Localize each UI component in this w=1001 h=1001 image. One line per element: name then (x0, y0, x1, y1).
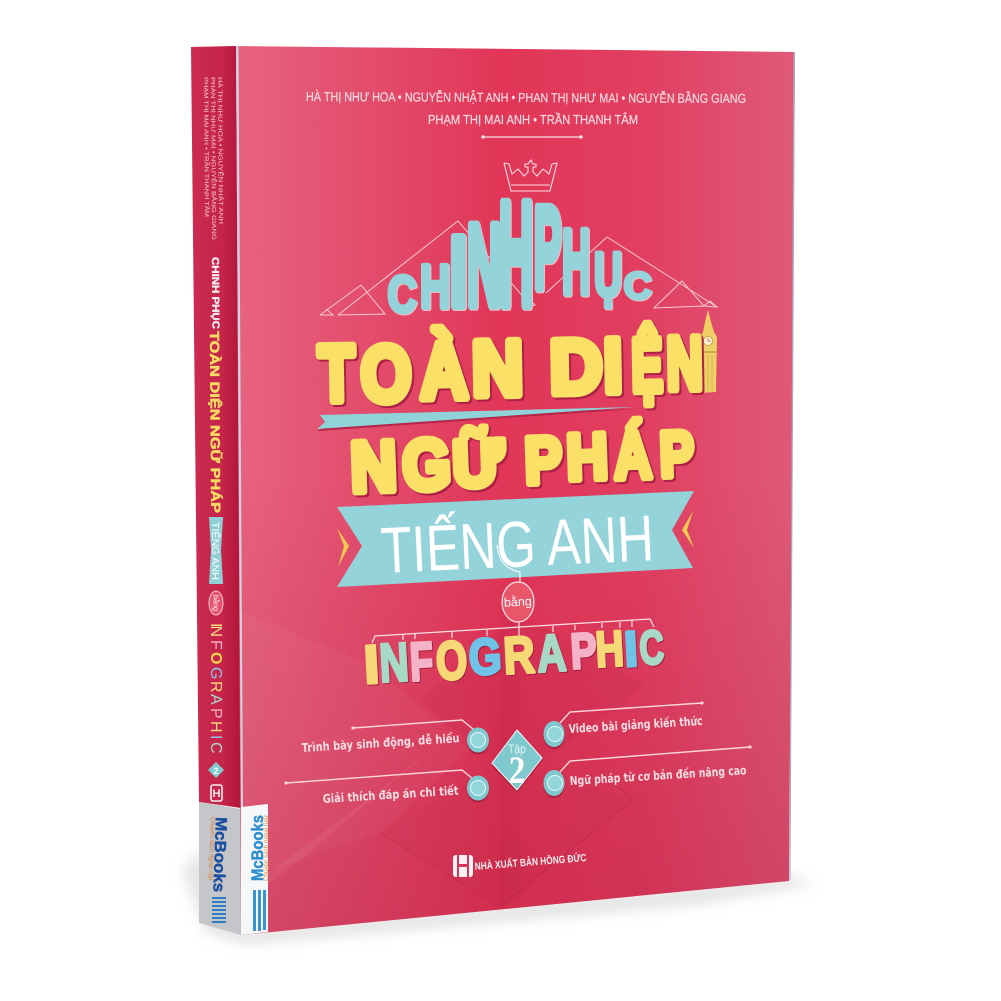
title: chinh phuc: N (467, 200, 501, 330)
spine bang badge (209, 591, 223, 615)
authors (306, 89, 746, 127)
infographic tree connector (372, 619, 654, 643)
volume number: 2 (509, 749, 525, 792)
spine infographic: P (207, 708, 224, 719)
spine authors: PHAN THỊ NHƯ MAI • NGUYỄN BẰNG GIANG (209, 77, 218, 240)
title: chinh phuc: Ụ (594, 241, 622, 310)
authors divider (481, 135, 583, 139)
publisher (453, 851, 587, 877)
spine label (199, 802, 241, 935)
title: infographic: A (536, 623, 568, 683)
spine authors: PHẠM THỊ MAI ANH • TRẦN THANH TÂM (202, 77, 210, 217)
spine ribbon: TIẾNG ANH (209, 522, 222, 580)
title: ngu phap: H (565, 420, 609, 495)
publisher logo (453, 855, 473, 877)
feature: video (560, 701, 704, 736)
banner text: TIẾNG ANH (379, 501, 655, 587)
spine infographic: C (207, 742, 224, 754)
spine volume badge: 2 (213, 766, 219, 776)
front cover (236, 46, 795, 935)
title: infographic: R (502, 626, 536, 686)
title: chinh phuc: C (387, 265, 417, 323)
spine authors (202, 77, 224, 240)
feature: trinh bay (301, 720, 473, 755)
title: ngu phap: N (349, 427, 398, 508)
left chevron (337, 528, 349, 567)
mountain outlines (320, 221, 717, 315)
icon: big ben tower (700, 310, 717, 393)
title: toan dien: I (603, 323, 623, 409)
spine infographic: A (207, 694, 224, 705)
title: toan dien: T (318, 329, 355, 418)
title: infographic: N (378, 633, 410, 694)
spine title: CHINH PHỤC (209, 257, 221, 329)
spine bang badge: bằng (212, 595, 220, 611)
spine title: TOÀN DIỆN NGỮ PHÁP (207, 331, 223, 513)
feature: ngu phap (560, 745, 752, 788)
spine infographic: H (207, 721, 224, 733)
front label strip (241, 804, 270, 935)
spine infographic: I (207, 735, 224, 739)
tieng anh banner (337, 491, 694, 587)
spine infographic: O (207, 652, 224, 664)
title: chinh phuc: P (534, 183, 561, 313)
title: chinh phuc: H (499, 174, 533, 336)
teal ribbon (317, 407, 635, 429)
title: ngu phap: G (401, 425, 452, 506)
spine label tagline: Chuyên sách ngoại ngữ (207, 817, 216, 882)
title: infographic: G (467, 627, 503, 686)
title: ngu phap: P (658, 418, 695, 491)
feature: ngu phap: Ngữ pháp từ cơ bản đến nâng cao (569, 763, 747, 788)
title: infographic (362, 620, 665, 695)
title: toan dien: O (360, 331, 412, 419)
title: toan dien: Ệ (631, 322, 663, 408)
feature bullets (467, 721, 564, 800)
book spine (191, 46, 241, 808)
title: chinh phuc: C (623, 265, 652, 307)
title: ngu phap (349, 417, 695, 508)
authors: HÀ THỊ NHƯ HOA • NGUYỄN NHẬT ANH • PHAN THỊ NHƯ MAI • NGUYỄN BẰNG GIANG (306, 89, 746, 106)
spine publisher logo (211, 785, 222, 801)
title: toan dien: À (419, 327, 469, 416)
spine publisher logo: H (213, 788, 221, 800)
title: toan dien: D (549, 323, 603, 410)
bang badge: bằng (503, 593, 532, 610)
publisher name: NHÀ XUẤT BẢN HỒNG ĐỨC (474, 851, 587, 873)
feature: giai thich: Giải thích đáp án chi tiết (322, 783, 459, 806)
volume badge (492, 730, 542, 792)
title: toan dien: N (471, 323, 524, 412)
title: chinh phuc (387, 174, 652, 336)
title: infographic: I (623, 621, 640, 677)
spine volume badge (208, 762, 224, 778)
title: toan dien (318, 320, 703, 419)
spine ribbon (209, 517, 223, 584)
title: infographic: P (569, 622, 598, 680)
spine authors: HÀ THỊ NHƯ HOA • NGUYỄN NHẬT ANH (216, 77, 224, 224)
spine infographic: F (207, 640, 224, 650)
cover edges (236, 46, 795, 880)
authors: PHẠM THỊ MAI ANH • TRẦN THANH TÂM (428, 112, 638, 127)
feature: giai thich (284, 770, 473, 806)
spine title (207, 257, 223, 513)
front label tagline: Chuyên sách ngoại ngữ (263, 814, 270, 881)
icon: crown (504, 160, 557, 191)
book shadow (182, 850, 815, 945)
spine infographic (207, 623, 224, 754)
spine infographic: R (207, 681, 224, 693)
spine label stripes (212, 897, 226, 923)
title: infographic: H (594, 620, 625, 678)
title: chinh phuc: H (562, 211, 590, 312)
connector hook (497, 545, 520, 582)
spine infographic: G (207, 667, 224, 679)
title: ngu phap: P (523, 423, 563, 498)
title: chinh phuc: I (449, 217, 468, 328)
volume label: Tập (508, 742, 526, 756)
title: infographic: C (638, 620, 665, 675)
front label stripes (253, 890, 266, 931)
bang badge (502, 582, 534, 622)
title: ngu phap: Á (613, 417, 653, 493)
cover facets (239, 600, 645, 907)
title: ngu phap: Ữ (451, 425, 506, 501)
spine infographic: IN (207, 623, 224, 637)
right chevron (682, 511, 694, 548)
title: infographic: O (434, 631, 469, 692)
title: chinh phuc: H (420, 254, 450, 322)
title: infographic: I (362, 634, 381, 695)
title: toan dien: N (666, 320, 703, 406)
title: infographic: F (408, 631, 435, 692)
feature: video: Video bài giảng kiến thức (568, 714, 703, 736)
spine label brand: McBooks (209, 817, 229, 893)
feature: trinh bay: Trình bày sinh động, dễ hiểu (301, 730, 460, 755)
front label brand: McBooks (248, 815, 267, 881)
